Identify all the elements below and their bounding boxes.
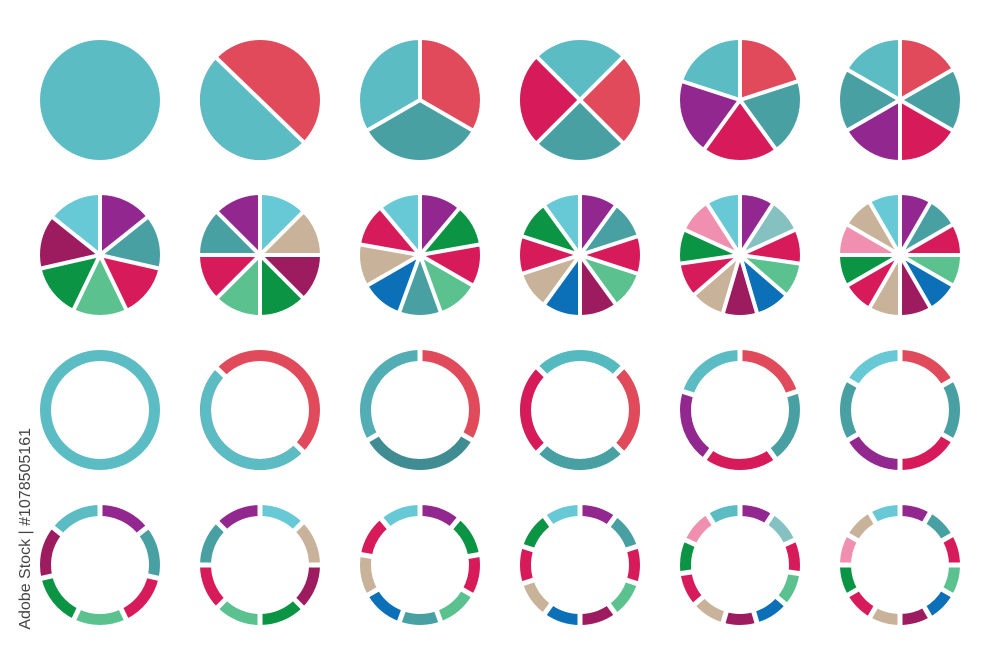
ring: 4 segments — [526, 356, 634, 464]
pie: 6 segments — [845, 36, 955, 164]
ring: 8 segments — [196, 501, 324, 629]
pie: 4 segments — [535, 55, 625, 145]
ring: 1 segment — [46, 356, 154, 464]
ring: 9 segments — [357, 501, 483, 625]
ring: 5 segments — [679, 346, 801, 464]
ring: 6 segments — [845, 346, 955, 474]
pie: 2 segments — [214, 56, 306, 144]
ring: 12 segments — [836, 501, 964, 629]
ring: 7 segments — [38, 501, 162, 623]
pie: 8 segments — [196, 191, 324, 319]
pie: 3 segments — [365, 36, 475, 132]
ring: 10 segments — [519, 501, 641, 629]
pie: 9 segments — [357, 191, 483, 315]
watermark id text: Adobe Stock | #1078505161 — [17, 428, 34, 630]
pie: 11 segments — [677, 191, 803, 316]
ring: 2 segments — [206, 356, 314, 464]
pie: 12 segments — [836, 191, 964, 319]
pie: 5 segments — [679, 36, 801, 152]
ring: 3 segments — [365, 346, 475, 464]
pie: 7 segments — [38, 191, 162, 313]
pie: 10 segments — [519, 191, 641, 319]
ring: 11 segments — [677, 501, 803, 626]
pie: 1 segment — [40, 40, 160, 160]
